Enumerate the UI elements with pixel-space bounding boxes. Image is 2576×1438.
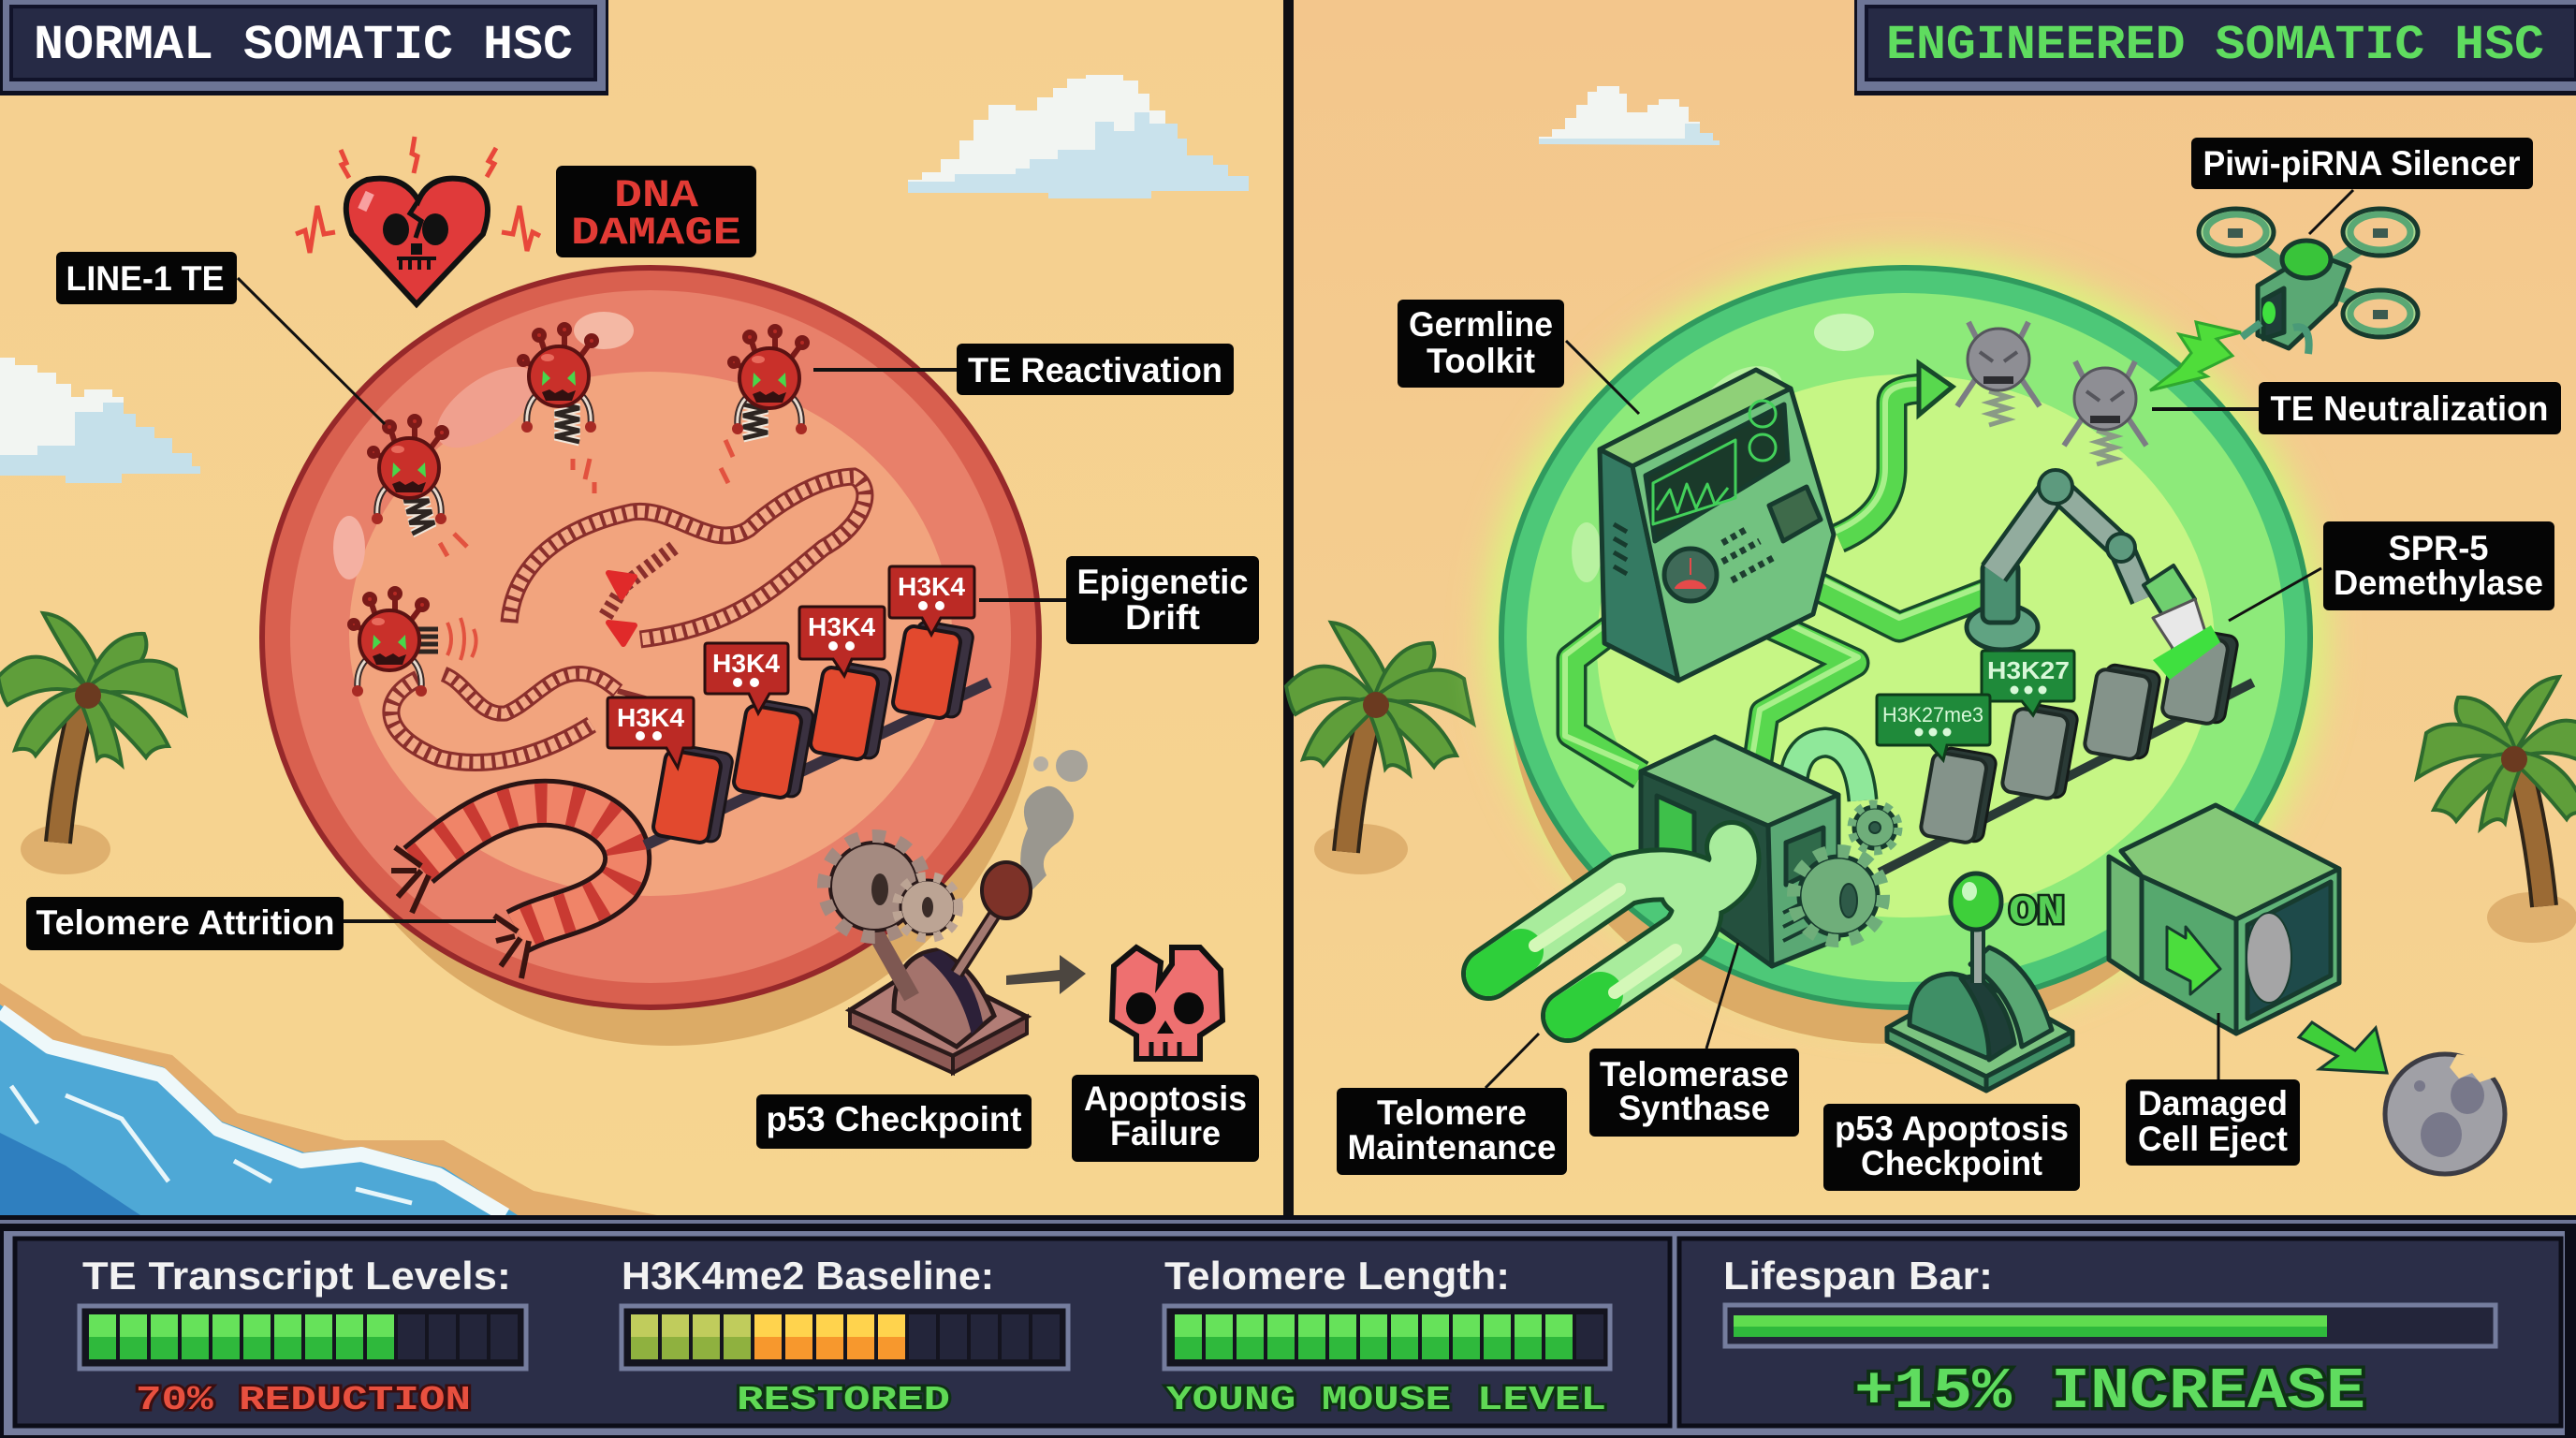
palm tree center xyxy=(1286,623,1473,874)
label: TE Neutralization: TE Neutralization xyxy=(2271,389,2548,428)
label: Epigenetic Drift: Epigenetic xyxy=(1076,563,1249,601)
label: Telomere Maintenance xyxy=(1337,1034,1567,1175)
H3K27 bubble: H3K27 xyxy=(1987,656,2070,684)
chromatin fiber xyxy=(645,682,989,845)
label: Epigenetic Drift: Drift xyxy=(1125,598,1200,637)
title: normal somatic HSC xyxy=(0,0,608,95)
arrow to apoptosis failure xyxy=(1006,955,1086,994)
label: Germline Toolkit: Toolkit xyxy=(1427,342,1535,380)
gauge: 13 of 14 xyxy=(1164,1306,1610,1369)
label: Apoptosis Failure: Apoptosis xyxy=(1084,1079,1247,1118)
icon: broken p53 lever with gears and smoke xyxy=(824,750,1088,1073)
panel: normal somatic HSC xyxy=(0,0,1283,1215)
telomere fraying xyxy=(391,803,627,978)
metric: TE transcript levels: 70% REDUCTION xyxy=(136,1381,471,1419)
label: TE Reactivation xyxy=(813,344,1234,395)
cloud: upper right xyxy=(908,75,1249,198)
lightning beam xyxy=(2150,322,2241,390)
cloud: small xyxy=(1539,86,1720,145)
label: Piwi-piRNA Silencer: Piwi-piRNA Silencer xyxy=(2203,144,2520,183)
synthase machine xyxy=(1641,737,1898,966)
telomere tube glowing xyxy=(1488,847,1734,1016)
H3K4 bubble 3: H3K4 xyxy=(808,612,875,641)
H3K4 bubble 2 xyxy=(705,643,788,713)
metric: lifespan bar: +15% INCREASE xyxy=(1854,1358,2365,1425)
text: ON: ON xyxy=(2009,889,2065,936)
label: Piwi-piRNA Silencer xyxy=(2191,138,2533,234)
H3K4 bubble 4 xyxy=(889,566,974,635)
metric: H3K4me2 baseline xyxy=(622,1254,1068,1419)
gauge: lifespan xyxy=(1725,1305,2496,1346)
metric: telomere length: YOUNG MOUSE LEVEL xyxy=(1166,1381,1606,1419)
label: p53 Checkpoint: p53 Checkpoint xyxy=(766,1100,1022,1138)
H3K4 bubble 1: H3K4 xyxy=(617,703,684,732)
label: Telomerase Synthase: Telomerase xyxy=(1600,1055,1789,1093)
virus: top right xyxy=(721,327,807,483)
metric: TE transcript levels xyxy=(80,1254,526,1419)
label: DNA damage xyxy=(556,166,756,257)
virus: lower left xyxy=(350,589,476,697)
label: SPR-5 Demethylase: Demethylase xyxy=(2334,564,2543,602)
label: Telomerase Synthase xyxy=(1589,943,1799,1137)
palm tree xyxy=(0,613,185,874)
label: Telomere Attrition: Telomere Attrition xyxy=(36,903,334,942)
arrow head on pipe xyxy=(1919,363,1953,415)
metric: H3K4me2 baseline: RESTORED xyxy=(737,1381,950,1419)
cell shadow xyxy=(300,306,1039,1046)
label: Damaged Cell Eject xyxy=(2126,1013,2300,1166)
ejection chamber xyxy=(2109,805,2339,1034)
label: Telomere Attrition xyxy=(26,897,496,950)
label: Damaged Cell Eject: Damaged xyxy=(2138,1084,2288,1123)
label: p53 Apoptosis Checkpoint: Checkpoint xyxy=(1861,1144,2042,1182)
neutralized TE top xyxy=(1957,322,2040,425)
label: p53 Apoptosis Checkpoint xyxy=(1823,1104,2080,1191)
cell shadow xyxy=(1507,304,2275,1044)
label: Germline Toolkit xyxy=(1398,300,1639,414)
label: p53 Apoptosis Checkpoint: p53 Apoptosis xyxy=(1835,1109,2069,1148)
label: Telomerase Synthase: Synthase xyxy=(1618,1089,1770,1127)
label: p53 Checkpoint xyxy=(756,1094,1032,1149)
H3K4 bubble 3 xyxy=(799,607,885,676)
label: Germline Toolkit: Germline xyxy=(1409,305,1553,344)
cell: engineered HSC nucleus xyxy=(1501,268,2310,1007)
H3K27 bubble xyxy=(1982,651,2074,715)
label: DNA damage: DAMAGE xyxy=(571,211,741,256)
label: SPR-5 Demethylase: SPR-5 xyxy=(2389,529,2488,567)
H3K4 bubble 1 xyxy=(607,697,694,768)
H3K27me3 bubble: H3K27me3 xyxy=(1882,703,1983,726)
broken heart skull icon xyxy=(296,137,540,304)
DNA strands xyxy=(391,477,865,763)
palm tree right xyxy=(2417,677,2576,943)
label: Telomere Maintenance: Telomere xyxy=(1377,1093,1527,1132)
title: engineered somatic HSC: ENGINEERED SOMATIC HSC xyxy=(1886,18,2544,73)
title: engineered somatic HSC xyxy=(1854,0,2576,95)
label: Apoptosis Failure: Failure xyxy=(1110,1114,1221,1152)
label: TE Neutralization xyxy=(2152,382,2561,434)
metric: telomere length xyxy=(1164,1254,1610,1419)
H3K27me3 bubble xyxy=(1877,695,1990,760)
label: Apoptosis Failure xyxy=(1072,1075,1259,1162)
console: germline toolkit machine xyxy=(1600,370,1834,681)
label: TE Reactivation: TE Reactivation xyxy=(968,351,1222,389)
label: LINE-1 TE: LINE-1 TE xyxy=(66,259,225,298)
cell glow xyxy=(1485,252,2327,1023)
eject arrow xyxy=(2299,1022,2387,1073)
label: Telomere Maintenance: Maintenance xyxy=(1348,1128,1556,1167)
robotic arm with brush xyxy=(1967,470,2220,680)
icon: damaged moon cell xyxy=(2385,1054,2505,1174)
label: Damaged Cell Eject: Cell Eject xyxy=(2138,1120,2288,1158)
title: normal somatic HSC: NORMAL SOMATIC HSC xyxy=(34,18,573,73)
gauge: 10 of 14 xyxy=(80,1306,526,1369)
panel divider xyxy=(1283,0,1294,1215)
label: Epigenetic Drift xyxy=(979,556,1259,644)
panel: stats dashboard xyxy=(0,1215,2576,1438)
metric: telomere length: Telomere Length: xyxy=(1164,1254,1510,1298)
neutralized TE lower xyxy=(2064,361,2146,464)
label: SPR-5 Demethylase xyxy=(2229,521,2554,621)
cell: normal HSC nucleus xyxy=(262,268,1039,1007)
neutralized histones xyxy=(1920,628,2239,844)
active p53 lever xyxy=(1887,873,2072,1091)
metric: TE transcript levels: TE Transcript Levels: xyxy=(82,1254,511,1298)
icon: pink skull xyxy=(1112,947,1222,1059)
histones with H3K4 marks xyxy=(651,621,974,844)
glowing pipes xyxy=(1565,384,1986,800)
metric: H3K4me2 baseline: H3K4me2 Baseline: xyxy=(622,1254,994,1298)
metric: lifespan bar: Lifespan Bar: xyxy=(1723,1254,1993,1298)
chromatin fiber xyxy=(1880,682,2253,873)
gauge: 9 of 14 xyxy=(622,1306,1068,1369)
label: DNA damage: DNA xyxy=(614,173,699,218)
panel: engineered somatic HSC xyxy=(1286,0,2576,1215)
label: LINE-1 TE xyxy=(56,252,385,424)
drone: Piwi-piRNA silencer xyxy=(2199,209,2418,354)
virus: LINE-1 TE upper left xyxy=(370,417,467,556)
ocean shoreline xyxy=(0,983,657,1215)
H3K4 bubble 2: H3K4 xyxy=(712,649,780,678)
H3K4 bubble 4: H3K4 xyxy=(898,572,965,601)
cloud: left xyxy=(0,358,200,483)
virus: top center xyxy=(520,325,596,493)
metric: lifespan bar xyxy=(1723,1254,2496,1425)
